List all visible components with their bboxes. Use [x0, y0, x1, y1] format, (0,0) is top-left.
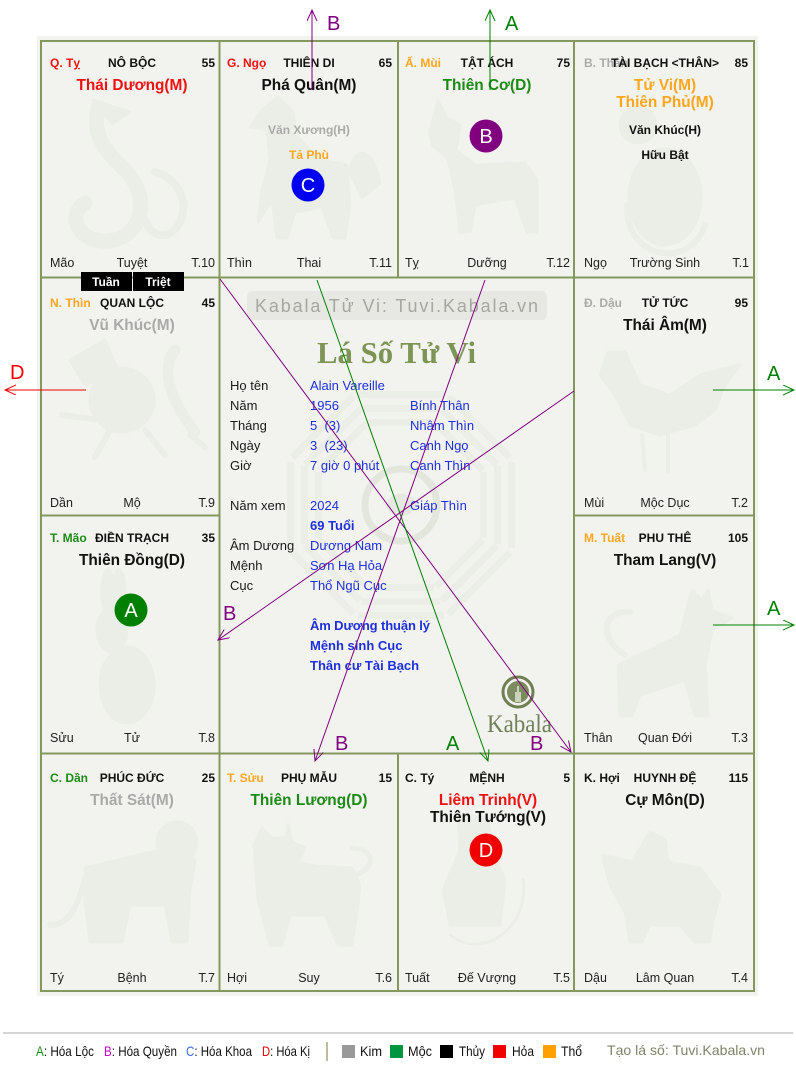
arrow: B diagonal to bottom right — [220, 279, 571, 755]
icon: horse watermark — [250, 97, 380, 238]
footer rule — [3, 1032, 793, 1034]
panel: Hợi palace — [584, 770, 748, 985]
icon: circle D — [470, 834, 502, 866]
panel: Mùi palace: TẬT ÁCH — [461, 55, 513, 70]
logo: Kabala — [487, 677, 552, 738]
panel: Ngọ palace: Thai — [297, 256, 321, 270]
panel: Mão palace: Thiên Đồng(D) — [79, 552, 185, 569]
panel: Mùi palace: Thiên Cơ(D) — [443, 77, 531, 94]
arrow: A diagonal to bottom: A — [446, 733, 460, 755]
panel: Mão palace: 35 — [202, 531, 215, 545]
panel: Tý palace: Tuất — [405, 971, 430, 985]
legend: elements: Mộc — [408, 1043, 432, 1059]
panel: Tỵ palace: Mão — [50, 256, 74, 270]
panel: Dậu palace: Mộc Dục — [640, 496, 690, 510]
panel: Sửu palace — [227, 770, 392, 985]
icon: snake watermark — [76, 100, 183, 241]
text block: birth information: Năm xem — [230, 498, 286, 513]
panel: Tuất palace: T.3 — [731, 731, 748, 745]
text block: birth information: Bính Thân — [410, 398, 470, 413]
chart grid — [41, 41, 754, 991]
panel: Mão palace: T. Mão — [50, 531, 87, 545]
text block: birth information: Canh Ngọ — [410, 438, 469, 453]
icon: rat watermark — [443, 815, 524, 944]
panel: Tỵ palace — [50, 55, 215, 270]
banner: Kabala Tử Vi url: Kabala Tử Vi: Tuvi.Kabala.vn — [255, 296, 538, 316]
badge: Tuần Triệt: Tuần — [92, 275, 120, 289]
arrow: A to top — [490, 10, 519, 90]
panel: Hợi palace: K. Hợi — [584, 771, 620, 785]
legend: transformations: D: Hóa Kị — [262, 1043, 310, 1059]
icon: circle B — [470, 120, 502, 152]
text block: birth information: Tháng — [230, 418, 267, 433]
arrow: A to top: A — [505, 13, 519, 35]
arrow: B diagonal to bottom right: B — [530, 733, 543, 755]
panel: Tuất palace — [584, 530, 748, 745]
panel: Mùi palace: 75 — [557, 56, 570, 70]
panel: Mùi palace — [405, 55, 570, 270]
icon: circle D: D — [479, 840, 493, 862]
panel: Tuất palace: 105 — [728, 531, 748, 545]
panel: Dậu palace: Đ. Dậu — [584, 296, 622, 310]
title: Lá Số Tử Vi: Lá Số Tử Vi — [317, 335, 476, 370]
panel: Thân palace: Văn Khúc(H) — [629, 123, 701, 137]
arrow: D to left — [5, 362, 86, 390]
text block: birth information: Ngày — [230, 438, 261, 453]
icon: circle C — [292, 168, 324, 202]
panel: Tuất palace: Thân — [584, 731, 613, 745]
panel: Thìn palace — [50, 295, 215, 510]
icon: circle A: A — [124, 600, 138, 622]
text block: birth information: Âm Dương thuận lý — [310, 618, 431, 633]
panel: Tý palace: Thiên Tướng(V) — [430, 809, 546, 826]
panel: Sửu palace: 15 — [379, 771, 392, 785]
text block: birth information: Dương Nam — [310, 538, 382, 553]
panel: Sửu palace: Suy — [298, 971, 321, 985]
text block: birth information: 5 (3) — [310, 418, 340, 433]
panel: Tý palace: Đế Vượng — [458, 971, 516, 985]
panel: Tý palace: Liêm Trinh(V) — [439, 792, 537, 809]
panel: Hợi palace: Lâm Quan — [636, 971, 694, 985]
panel: Tỵ palace: Thái Dương(M) — [76, 77, 188, 94]
panel: Dậu palace: T.2 — [731, 496, 748, 510]
footer link text: Tạo lá số: Tuvi.Kabala.vn — [607, 1042, 765, 1058]
panel: Thân palace: 85 — [735, 56, 748, 70]
panel: Ngọ palace: Phá Quân(M) — [262, 77, 356, 94]
panel: Thìn palace: Vũ Khúc(M) — [89, 317, 175, 334]
legend: elements: Thổ — [561, 1043, 582, 1059]
icon: dog watermark — [607, 590, 732, 716]
panel: Dậu palace: Mùi — [584, 496, 604, 510]
panel: Mão palace: T.8 — [198, 731, 215, 745]
text block: birth information: Âm Dương — [230, 538, 294, 553]
panel: Dần palace: Tý — [50, 971, 65, 985]
legend: elements: Thủy — [459, 1043, 485, 1059]
panel: Hợi palace: Dậu — [584, 971, 607, 985]
icon: tiger watermark — [50, 822, 197, 942]
icon: pig watermark — [602, 832, 720, 942]
text block: birth information: 7 giờ 0 phút — [310, 458, 380, 473]
legend: elements: Hỏa — [512, 1043, 534, 1059]
panel: Mão palace: Sửu — [50, 731, 74, 745]
text block: birth information: Giáp Thìn — [410, 498, 467, 513]
panel: Ngọ palace: Thìn — [227, 256, 252, 270]
panel: Mùi palace: Dưỡng — [467, 256, 507, 270]
arrow: B diagonal to left — [218, 391, 574, 640]
panel: Hợi palace: Cự Môn(D) — [625, 792, 705, 809]
panel: Sửu palace: T. Sửu — [227, 771, 264, 785]
panel: Thìn palace: Dần — [50, 496, 73, 510]
legend divider — [326, 1042, 328, 1061]
text block: birth information: Alain Vareille — [310, 378, 385, 393]
badge: Tuần Triệt: Triệt — [145, 275, 171, 289]
panel: Sửu palace: T.6 — [375, 971, 392, 985]
panel: Thân palace: T.1 — [732, 256, 749, 270]
panel: Mùi palace: T.12 — [546, 256, 570, 270]
panel: Tuất palace: Tham Lang(V) — [614, 552, 716, 569]
icon: circle A — [114, 594, 148, 626]
panel: Tý palace: T.5 — [553, 971, 570, 985]
watermark: bagua diagram — [287, 391, 515, 619]
panel: Tuất palace: PHU THÊ — [639, 530, 691, 545]
text block: birth information: Giờ — [230, 458, 252, 473]
text block: birth information: 1956 — [310, 398, 339, 413]
legend: transformations — [36, 1043, 310, 1059]
text block: birth information — [230, 378, 474, 673]
text block: birth information: Năm — [230, 398, 257, 413]
icon: rooster watermark — [600, 352, 740, 472]
legend: transformations: B: Hóa Quyền — [104, 1043, 177, 1059]
panel: Sửu palace: PHỤ MẪU — [281, 770, 337, 785]
panel: Tý palace — [405, 770, 570, 985]
text block: birth information: Thổ Ngũ Cục — [310, 578, 387, 593]
text block: birth information: Thân cư Tài Bạch — [310, 658, 419, 673]
panel: Dần palace: Bệnh — [117, 971, 147, 985]
text block: birth information: Họ tên — [230, 378, 268, 393]
panel: Thân palace: Tử Vi(M) — [634, 77, 696, 94]
panel: Thìn palace: QUAN LỘC — [100, 295, 164, 310]
logo: Kabala: Kabala — [487, 711, 552, 738]
text block: birth information: Mệnh — [230, 558, 263, 573]
arrow: A to right upper — [713, 363, 794, 390]
legend: elements: Kim — [360, 1043, 382, 1059]
text block: birth information: 2024 — [310, 498, 339, 513]
panel: Mão palace: ĐIỀN TRẠCH — [95, 530, 169, 545]
panel: Dậu palace — [584, 295, 748, 510]
panel: Tỵ palace: 55 — [202, 56, 215, 70]
panel: Tỵ palace: NÔ BỘC — [108, 55, 156, 70]
text block: birth information: 3 (23) — [310, 438, 348, 453]
panel: Sửu palace: Hợi — [227, 971, 247, 985]
panel: Mùi palace: Ấ. Mùi — [405, 55, 441, 70]
panel: Dần palace — [50, 770, 215, 985]
panel: Thân palace: Trường Sinh — [630, 256, 700, 270]
icon: ox watermark — [254, 824, 370, 945]
panel: Ngọ palace: THIÊN DI — [283, 55, 335, 70]
panel: Ngọ palace: Văn Xương(H) — [268, 123, 350, 137]
panel: Thân palace — [584, 55, 749, 270]
text block: birth information: Sơn Hạ Hỏa — [310, 558, 383, 573]
panel: Dần palace: 25 — [202, 771, 215, 785]
panel: Tuất palace: M. Tuất — [584, 531, 625, 545]
arrow: B diagonal to bottom left — [315, 280, 485, 761]
arrow: A to right lower: A — [767, 598, 781, 620]
panel: Sửu palace: Thiên Lương(D) — [251, 792, 367, 809]
panel: Thìn palace: Mộ — [123, 496, 141, 510]
panel: Thân palace: Hữu Bật — [641, 148, 689, 162]
text block: birth information: Canh Thìn — [410, 458, 470, 473]
text block: birth information: Mệnh sinh Cục — [310, 638, 402, 653]
panel: Ngọ palace — [227, 55, 392, 270]
text block: birth information: Nhâm Thìn — [410, 418, 474, 433]
panel: Mão palace: Tử — [124, 731, 140, 745]
panel: Tý palace: MỆNH — [469, 770, 505, 785]
panel: Mùi palace: Tỵ — [405, 256, 420, 270]
arrow: D to left: D — [10, 362, 24, 384]
panel: Thìn palace: 45 — [202, 296, 215, 310]
arrow: A diagonal to bottom — [317, 280, 488, 761]
panel: Tý palace: 5 — [563, 771, 570, 785]
badge: Tuần Triệt — [81, 272, 184, 291]
panel: Thân palace: TÀI BẠCH <THÂN> — [611, 55, 719, 70]
panel: Mão palace — [50, 530, 215, 745]
panel: Dần palace: Thất Sát(M) — [90, 792, 174, 809]
panel: Dần palace: C. Dần — [50, 771, 88, 785]
panel: Hợi palace: T.4 — [731, 971, 748, 985]
panel: Tỵ palace: Tuyệt — [117, 256, 148, 270]
panel: Hợi palace: HUYNH ĐỆ — [634, 770, 696, 785]
legend: elements — [342, 1043, 582, 1059]
icon: goat watermark — [430, 100, 537, 232]
banner: Kabala Tử Vi url — [247, 291, 547, 320]
panel: Thân palace: Thiên Phủ(M) — [616, 94, 714, 111]
arrow: B diagonal to bottom left: B — [335, 733, 348, 755]
arrow: B to top — [312, 10, 340, 90]
icon: monkey watermark — [620, 107, 705, 253]
panel: Dậu palace: Thái Âm(M) — [623, 316, 707, 334]
arrow: B diagonal to left: B — [223, 603, 236, 625]
icon: dragon watermark — [62, 340, 205, 457]
arrow: A to right upper: A — [767, 363, 781, 385]
panel: Tý palace: C. Tý — [405, 771, 435, 785]
panel: Tỵ palace: Q. Tỵ — [50, 56, 80, 70]
panel: Tỵ palace: T.10 — [191, 256, 215, 270]
panel: Dậu palace: 95 — [735, 296, 748, 310]
panel: Thìn palace: T.9 — [198, 496, 215, 510]
panel: Ngọ palace: T.11 — [369, 256, 392, 270]
arrow: B to top: B — [327, 13, 340, 35]
arrow: A to right lower — [713, 598, 794, 625]
panel: Dậu palace: TỬ TỨC — [642, 295, 689, 310]
panel: Thân palace: Ngọ — [584, 256, 607, 270]
panel: Dần palace: T.7 — [198, 971, 215, 985]
panel: Thân palace: B. Thân — [584, 56, 628, 70]
legend: transformations: C: Hóa Khoa — [186, 1043, 252, 1059]
panel: Ngọ palace: Tả Phù — [289, 148, 329, 162]
icon: circle C: C — [301, 175, 315, 197]
panel: Thìn palace: N. Thìn — [50, 296, 91, 310]
panel: Ngọ palace: 65 — [379, 56, 392, 70]
panel: Hợi palace: 115 — [729, 771, 748, 785]
text block: birth information: Cục — [230, 578, 254, 593]
icon: rabbit watermark — [97, 570, 154, 723]
panel: Ngọ palace: G. Ngọ — [227, 56, 266, 70]
panel: Dần palace: PHÚC ĐỨC — [100, 770, 165, 785]
icon: circle B: B — [479, 126, 493, 148]
panel: Tuất palace: Quan Đới — [638, 731, 692, 745]
legend: transformations: A: Hóa Lộc — [36, 1043, 94, 1059]
text block: birth information: 69 Tuổi — [310, 518, 355, 533]
